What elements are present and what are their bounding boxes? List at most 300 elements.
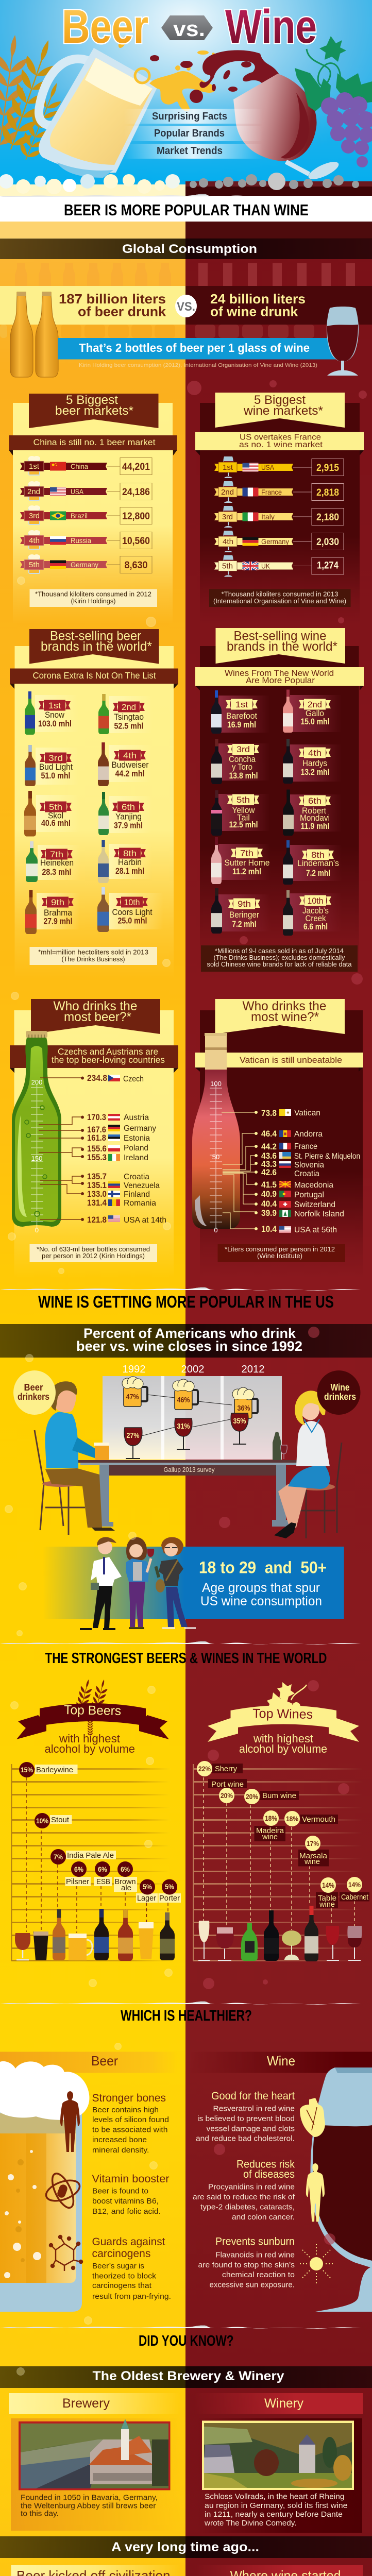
brand Coors Light: Coors Light xyxy=(112,907,153,917)
legend: wine countries: 39.9 xyxy=(261,1208,277,1218)
brand Yanjing: Yanjing xyxy=(115,812,142,821)
legend: beer countries: Germany xyxy=(124,1124,156,1133)
item 5% Lager: Lager xyxy=(137,1894,156,1903)
item 14% Cabernet: Cabernet xyxy=(341,1893,369,1902)
row China: 44,201 xyxy=(122,462,150,472)
item 18% Vermouth: Vermouth xyxy=(302,1815,335,1824)
legend: wine countries: 41.5 xyxy=(261,1180,277,1190)
legend: beer countries: 135.1 xyxy=(87,1180,107,1190)
brand Concha y Toro: 13.8 mhl xyxy=(229,771,258,781)
item 17% Marsala wine: Marsala xyxy=(299,1852,328,1860)
heading band: which is healthier: WHICH IS HEALTHIER? xyxy=(121,2007,252,2024)
icon: human body xyxy=(60,2091,80,2152)
footnote: (Wine Institute) xyxy=(257,1252,302,1260)
drop lines xyxy=(26,1777,168,1933)
figure: woman xyxy=(126,1537,154,1628)
brand Barefoot: Barefoot xyxy=(226,711,257,721)
bubble: wine drinkers: drinkers xyxy=(324,1392,356,1402)
wine glass 27% xyxy=(124,1428,142,1459)
footnote: *Thousand kiloliters consumed in 2013 xyxy=(222,590,338,598)
chart: green bottle gauge xyxy=(12,1031,61,1234)
text: good for the heart: vessel damage and clots xyxy=(206,2125,295,2133)
row Russia: 4th xyxy=(29,536,40,545)
row USA: USA xyxy=(71,487,84,496)
row Germany: Germany xyxy=(261,537,289,546)
legend: wine countries: 44.2 xyxy=(261,1142,277,1151)
row France: 2nd xyxy=(221,488,234,497)
figure: glasses man xyxy=(155,1537,196,1628)
chart: strongest wines xyxy=(193,1761,369,1961)
subheading band xyxy=(10,1045,178,1073)
row UK: 1,274 xyxy=(317,561,339,571)
footnote: *No. of 633-ml beer bottles consumed xyxy=(37,1245,150,1253)
brand Yanjing: 6th xyxy=(122,802,135,812)
icon: human body xyxy=(306,2163,325,2222)
text: guards against carcinogens xyxy=(92,2236,171,2301)
year labels: 2012 xyxy=(241,1364,265,1375)
brand Harbin: Harbin xyxy=(118,857,142,867)
text: vitamin booster: B12, and folic acid. xyxy=(92,2207,161,2216)
footnote: *mhl=million hectoliters sold in 2013 xyxy=(38,948,148,956)
table: Gallup 2013 survey xyxy=(164,1466,215,1473)
legend: beer countries: Ireland xyxy=(124,1154,148,1162)
legend: beer countries: 161.8 xyxy=(87,1133,106,1143)
text: guards against carcinogens: Beer’s sugar is xyxy=(92,2262,144,2270)
title bar xyxy=(195,2565,363,2576)
item 7% India Pale Ale xyxy=(50,1849,116,1960)
text: prevents sunburn xyxy=(198,2236,295,2290)
subtitle strips xyxy=(124,109,263,159)
footnote: (The Drinks Business); excludes domestically xyxy=(213,954,345,961)
ribbon heading xyxy=(29,393,159,428)
brand Jacob's Creek: Creek xyxy=(305,913,326,923)
drop lines xyxy=(204,1777,354,1930)
year labels xyxy=(123,1364,265,1375)
row China: 1st xyxy=(29,462,40,471)
item 14% Table wine: Table xyxy=(318,1894,336,1903)
leader lines xyxy=(39,1078,82,1219)
chart: beer vs wine drinkers xyxy=(13,1364,361,1538)
ribbon heading: Who drinks the xyxy=(54,999,137,1013)
item 6% Brown ale xyxy=(114,1861,137,1961)
item 20% Port wine xyxy=(208,1779,247,1960)
legend: wine countries: 42.6 xyxy=(261,1167,277,1177)
badge: top beers xyxy=(16,1678,169,1755)
chart: green bottle gauge: 0 xyxy=(35,1226,39,1234)
legend: beer countries: USA at 14th xyxy=(124,1216,166,1225)
badge: top wines: alcohol by volume xyxy=(239,1742,327,1755)
brand Robert Mondavi: 6th xyxy=(308,796,322,806)
figure: young man xyxy=(80,1537,122,1629)
brand Barefoot xyxy=(211,690,270,734)
text: good for the heart: Good for the heart xyxy=(211,2090,295,2102)
legend: wine countries: France xyxy=(294,1142,317,1151)
item 7% India Pale Ale: 7% xyxy=(54,1853,63,1861)
ribbon heading: 5 Biggest xyxy=(66,393,118,407)
vs. badge xyxy=(175,295,197,317)
text xyxy=(204,2493,347,2528)
stat: beer litres: of beer drunk xyxy=(78,304,166,319)
subheading band: Corona Extra Is Not On The List xyxy=(33,670,156,681)
callout: ratio: That’s 2 bottles of beer per 1 glass of wine xyxy=(79,341,310,354)
item 5% Porter: Porter xyxy=(159,1894,180,1903)
legend: beer countries: 167.6 xyxy=(87,1125,106,1134)
footnote xyxy=(30,589,157,607)
brand Hardys: 13.2 mhl xyxy=(301,767,330,777)
decorative bubbles left xyxy=(5,577,178,2576)
section band: percent of Americans: beer vs. wine closes in since 1992 xyxy=(76,1338,302,1354)
consumption comparison xyxy=(0,286,372,377)
brand Yellow Tail xyxy=(211,790,270,836)
row Germany: 5th xyxy=(29,561,40,569)
row USA xyxy=(20,481,152,501)
text: reduces risk of diseases: Procyanidins in red wine xyxy=(208,2182,295,2192)
subheading band: US overtakes France xyxy=(240,433,321,442)
row USA: USA xyxy=(261,463,275,471)
brand Coors Light: 25.0 mhl xyxy=(117,916,147,925)
brand Beringer: 9th xyxy=(238,899,251,909)
text: au region in Germany, sold its first wine xyxy=(205,2501,347,2510)
item 15% Barleywine xyxy=(15,1762,78,1960)
brand Budweiser: Budweiser xyxy=(111,760,149,770)
brand Skol xyxy=(24,791,79,837)
item 6% Pilsner: 6% xyxy=(74,1865,83,1873)
row Italy xyxy=(214,506,344,528)
text: stronger bones xyxy=(92,2092,169,2155)
text xyxy=(21,2494,158,2518)
ribbon heading: brands in the world* xyxy=(227,639,337,654)
legend: beer countries: 131.4 xyxy=(87,1198,107,1208)
subheading band xyxy=(10,669,178,689)
text: guards against carcinogens: result from pan-frying. xyxy=(92,2292,171,2301)
callout: ratio: Kirin Holding beer consumption (2012), International Organisation of Vine and Wine (2013) xyxy=(79,362,317,368)
panel: winery xyxy=(195,2393,363,2533)
ribbon heading xyxy=(215,999,345,1034)
legend: beer countries: 155.3 xyxy=(87,1153,107,1162)
beer mug 47% xyxy=(122,1377,147,1406)
row Italy: 2,180 xyxy=(316,512,339,523)
ribbon heading xyxy=(31,999,160,1034)
row Italy: Italy xyxy=(261,513,275,521)
brand Jacob's Creek: 10th xyxy=(307,896,324,906)
title: Beer vs. Wine xyxy=(62,1,317,53)
brand Budweiser xyxy=(98,742,152,786)
legend: beer countries: Austria xyxy=(124,1113,149,1122)
brand Budweiser: 4th xyxy=(123,751,137,760)
text: guards against carcinogens: carcinogens xyxy=(92,2248,150,2260)
heading band: did you know: DID YOU KNOW? xyxy=(139,2333,234,2349)
legend: wine countries: St. Pierre & Miquelon xyxy=(294,1152,360,1161)
icon: beer mug xyxy=(39,36,159,178)
callout: ratio xyxy=(58,338,342,368)
row Brazil: 12,800 xyxy=(122,511,150,522)
brand Yellow Tail: 12.5 mhl xyxy=(229,820,258,829)
text: wrote The Divine Comedy. xyxy=(204,2519,297,2528)
ribbon heading xyxy=(29,629,159,664)
callout: age groups xyxy=(43,1537,344,1629)
table xyxy=(78,1460,316,1527)
text: Founded in 1050 in Bavaria, Germany, xyxy=(21,2494,158,2502)
heading band: wine is getting more popular xyxy=(0,1287,361,1311)
wine glass 35% xyxy=(231,1413,248,1444)
item 20% Bum wine xyxy=(241,1789,299,1961)
title bar xyxy=(11,2565,180,2576)
text: reduces risk of diseases: are said to reduce the risk of xyxy=(193,2193,295,2201)
text: vitamin booster xyxy=(92,2173,169,2216)
brand Lindeman's xyxy=(283,840,342,885)
chart: strongest beers xyxy=(11,1762,181,1961)
row France: France xyxy=(261,488,282,496)
section band: percent of Americans: Percent of Americans who drink xyxy=(83,1326,296,1341)
icon: beer splash xyxy=(135,50,215,111)
brand Bud Light: 51.0 mhl xyxy=(41,771,70,781)
brand Hardys: Hardys xyxy=(302,758,327,768)
bubble: beer drinkers: Beer xyxy=(24,1382,43,1393)
footnote xyxy=(30,1244,157,1262)
chart background xyxy=(103,1376,282,1460)
section band: percent of Americans xyxy=(0,1324,372,1358)
text: guards against carcinogens: carcinogens that xyxy=(92,2281,152,2290)
footnote: sold Chinese wine brands for lack of reliable data xyxy=(207,960,352,968)
row USA: 2nd xyxy=(27,487,40,496)
ribbon heading: Who drinks the xyxy=(242,999,327,1013)
legend: beer countries xyxy=(81,1073,166,1225)
heading band: beer is more popular xyxy=(0,194,372,239)
brand Beringer xyxy=(211,888,270,934)
section band: oldest brewery and winery xyxy=(0,2366,372,2388)
brand Brahma: 9th xyxy=(51,897,64,907)
legend: beer countries: 121.8 xyxy=(87,1215,107,1225)
photo: Schloss Vollrads xyxy=(202,2420,354,2490)
wine glass 35%: 35% xyxy=(233,1417,246,1426)
item 20% Bum wine: 20% xyxy=(246,1792,258,1801)
text: prevents sunburn: are found to stop the skin’s xyxy=(198,2261,295,2269)
brand Hardys: 4th xyxy=(308,748,322,758)
item 7% India Pale Ale: India Pale Ale xyxy=(67,1851,114,1860)
brand Yellow Tail: 5th xyxy=(236,795,250,805)
decorative bubbles right xyxy=(187,380,367,2576)
brand Coors Light: 10th xyxy=(124,897,140,907)
text: prevents sunburn: excessive sun exposure. xyxy=(209,2280,295,2290)
trend lines xyxy=(142,1395,232,1436)
item 6% ESB: ESB xyxy=(96,1877,110,1886)
wine glass 27%: 27% xyxy=(127,1431,139,1440)
item 5% Lager: 5% xyxy=(143,1883,152,1891)
icon: wheat stalks xyxy=(0,33,67,164)
item 5% Porter: 5% xyxy=(165,1883,174,1891)
brand Concha y Toro: Concha xyxy=(229,754,256,764)
text: reduces risk of diseases: type-2 diabetes, cataracts, xyxy=(200,2203,295,2211)
bottle pattern strip xyxy=(15,263,355,286)
item 18% Vermouth xyxy=(282,1811,338,1959)
heading band xyxy=(188,2052,372,2073)
panel: best-selling wine brands xyxy=(195,628,364,979)
legend: wine countries: Slovenia xyxy=(294,1161,324,1170)
ribbon heading: Best-selling beer xyxy=(50,629,141,643)
title bar xyxy=(195,2393,363,2414)
brand Concha y Toro: 3rd xyxy=(236,744,250,754)
brand Beringer: 7.2 mhl xyxy=(232,919,257,929)
legend: wine countries: Norfolk Island xyxy=(294,1210,344,1218)
item 18% Madeira wine: wine xyxy=(262,1833,278,1841)
ribbon heading: wine markets* xyxy=(243,404,323,418)
row Brazil xyxy=(20,505,152,525)
brand Sutter Home xyxy=(211,837,270,884)
brand Robert Mondavi: 11.9 mhl xyxy=(301,821,330,831)
item 6% Pilsner xyxy=(65,1861,92,1960)
callout text: US wine consumption xyxy=(200,1594,322,1608)
text: the Weltenburg Abbey still brews beer xyxy=(21,2502,156,2510)
chart: green bottle gauge: 150 xyxy=(31,1155,42,1162)
heading band: Beer xyxy=(91,2053,118,2069)
legend: wine countries: 43.6 xyxy=(261,1151,277,1161)
row Russia: 10,560 xyxy=(122,536,150,547)
brand Lindeman's: 7.2 mhl xyxy=(306,868,330,878)
text: reduces risk of diseases: Reduces risk xyxy=(236,2159,295,2170)
ribbon heading: beer markets* xyxy=(55,404,133,418)
brand Sutter Home: Sutter Home xyxy=(225,858,270,868)
bubble: wine drinkers xyxy=(317,1370,361,1415)
heading band: strongest xyxy=(0,1641,361,1667)
subheading band: Czechs and Austrians are xyxy=(58,1046,158,1057)
text: stronger bones: Stronger bones xyxy=(92,2092,166,2104)
row Germany xyxy=(214,531,344,552)
item 20% Port wine: Port wine xyxy=(211,1780,244,1789)
footnote xyxy=(201,945,358,972)
row France xyxy=(214,481,344,503)
item 17% Marsala wine xyxy=(298,1836,329,1961)
vs. badge: VS. xyxy=(177,300,195,314)
legend: beer countries: Estonia xyxy=(124,1134,150,1143)
row Germany: 4th xyxy=(223,537,233,546)
heading band: beer is more popular: BEER IS MORE POPULAR THAN WINE xyxy=(64,201,309,219)
title bar: Winery xyxy=(264,2396,303,2411)
legend: wine countries: Portugal xyxy=(294,1191,324,1199)
brand Skol: 5th xyxy=(49,802,62,812)
legend: wine countries: 43.3 xyxy=(261,1159,277,1169)
item 6% Brown ale: 6% xyxy=(121,1865,130,1873)
row Germany: 2,030 xyxy=(316,537,339,548)
icon: sun xyxy=(299,2244,334,2284)
panel: who drinks the most beer xyxy=(10,999,178,1278)
text: reduces risk of diseases: of diseases xyxy=(243,2168,295,2180)
subtitle strips: Popular Brands xyxy=(154,128,225,139)
brand Harbin: 28.1 mhl xyxy=(115,866,144,876)
row USA: 24,186 xyxy=(122,487,150,498)
item 18% Vermouth: 18% xyxy=(286,1815,298,1823)
heading band: did you know xyxy=(0,2325,361,2349)
brand Snow: Snow xyxy=(45,710,65,720)
badge: top beers: Top Beers xyxy=(64,1703,121,1718)
item 14% Cabernet: 14% xyxy=(348,1880,361,1889)
photo: Weltenburg Abbey xyxy=(19,2419,170,2490)
ribbon heading: brands in the world* xyxy=(41,639,152,654)
text: stronger bones: mineral density. xyxy=(92,2146,149,2155)
chart: wine bottle gauge xyxy=(192,1033,240,1234)
ribbon heading: 5 Biggest xyxy=(254,393,306,407)
stat: beer litres: 187 billion liters xyxy=(59,291,166,307)
stat: beer litres xyxy=(59,291,166,319)
text: reduces risk of diseases: and colon cancer. xyxy=(232,2213,295,2222)
row UK: 5th xyxy=(222,562,233,571)
badge: top wines: with highest xyxy=(253,1732,313,1745)
brand Yellow Tail: Yellow xyxy=(232,805,255,815)
badge: top beers: with highest xyxy=(59,1732,120,1745)
brand Brahma: 27.9 mhl xyxy=(43,916,72,926)
legend: beer countries: Venezuela xyxy=(124,1181,160,1190)
brand Barefoot: 1st xyxy=(235,700,248,709)
row China: China xyxy=(71,462,88,470)
stat: wine litres: 24 billion liters xyxy=(210,291,306,307)
row Brazil: Brazil xyxy=(71,512,88,520)
text: prevents sunburn: Flavanoids in red wine xyxy=(215,2250,295,2260)
stat: wine litres: of wine drunk xyxy=(210,304,298,319)
brand Jacob's Creek: Jacob’s xyxy=(302,906,329,916)
item 22% Sherry: Sherry xyxy=(215,1765,237,1773)
beer mug 46% xyxy=(173,1379,198,1410)
brand Skol: Skol xyxy=(48,811,63,820)
chart: green bottle gauge: 200 xyxy=(31,1078,42,1086)
subheading band xyxy=(9,435,177,455)
brand Brahma: Brahma xyxy=(44,908,72,918)
footnote: (Kirin Holdings) xyxy=(71,597,115,605)
subheading band xyxy=(195,1053,363,1072)
legend: wine countries: Switzerland xyxy=(294,1200,335,1209)
text: good for the heart: and reduce bad cholesterol. xyxy=(196,2134,295,2143)
bubble: beer drinkers xyxy=(13,1370,56,1415)
callout text: Age groups that spur xyxy=(202,1581,320,1595)
year labels: 2002 xyxy=(181,1364,204,1375)
bubble: beer drinkers: drinkers xyxy=(18,1392,49,1402)
footnote xyxy=(217,1244,345,1262)
section band: oldest brewery and winery: The Oldest Brewery & Winery xyxy=(93,2369,284,2383)
beer mug 36%: 36% xyxy=(237,1404,250,1413)
row France: 2,818 xyxy=(316,487,339,498)
panel: 5 biggest wine markets xyxy=(195,393,364,624)
legend: wine countries: USA at 56th xyxy=(294,1226,337,1234)
wine glass 31% xyxy=(175,1418,192,1449)
icon: two beer bottles xyxy=(10,292,58,377)
chart: wine bottle gauge: 50 xyxy=(212,1153,219,1161)
wine glass 31%: 31% xyxy=(177,1422,190,1431)
subheading band: Vatican is still unbeatable xyxy=(240,1055,342,1065)
hero panel xyxy=(0,0,372,196)
title: Beer vs. Wine: vs. xyxy=(173,16,205,41)
text: vitamin booster: Beer is found to xyxy=(92,2187,148,2196)
brand Yanjing xyxy=(98,792,152,835)
beer mug 47%: 47% xyxy=(126,1393,139,1401)
brand Tsingtao: Tsingtao xyxy=(114,712,144,722)
brand Heineken xyxy=(26,841,81,882)
icon: grapes and vine leaves xyxy=(295,36,372,167)
legend: wine countries: 73.8 xyxy=(261,1108,277,1118)
brand Jacob's Creek xyxy=(283,890,342,936)
icon: wine splash xyxy=(150,50,281,103)
brand Jacob's Creek: 6.6 mhl xyxy=(303,922,328,931)
subtitle strips: Market Trends xyxy=(157,145,223,157)
text: guards against carcinogens: Guards against xyxy=(92,2236,165,2248)
legend: wine countries xyxy=(255,1108,360,1234)
item 14% Table wine xyxy=(316,1877,339,1960)
legend: wine countries: Andorra xyxy=(294,1130,323,1139)
item 10% Stout: 10% xyxy=(36,1817,48,1825)
brand Robert Mondavi: Robert xyxy=(302,806,326,816)
text: Schloss Vollrads, in the heart of Rheing xyxy=(205,2493,344,2501)
item 5% Lager xyxy=(136,1879,158,1959)
text: vitamin booster: boost vitamins B6, xyxy=(92,2197,159,2206)
item 17% Marsala wine: wine xyxy=(304,1857,320,1866)
panel: best-selling beer brands xyxy=(10,629,178,979)
